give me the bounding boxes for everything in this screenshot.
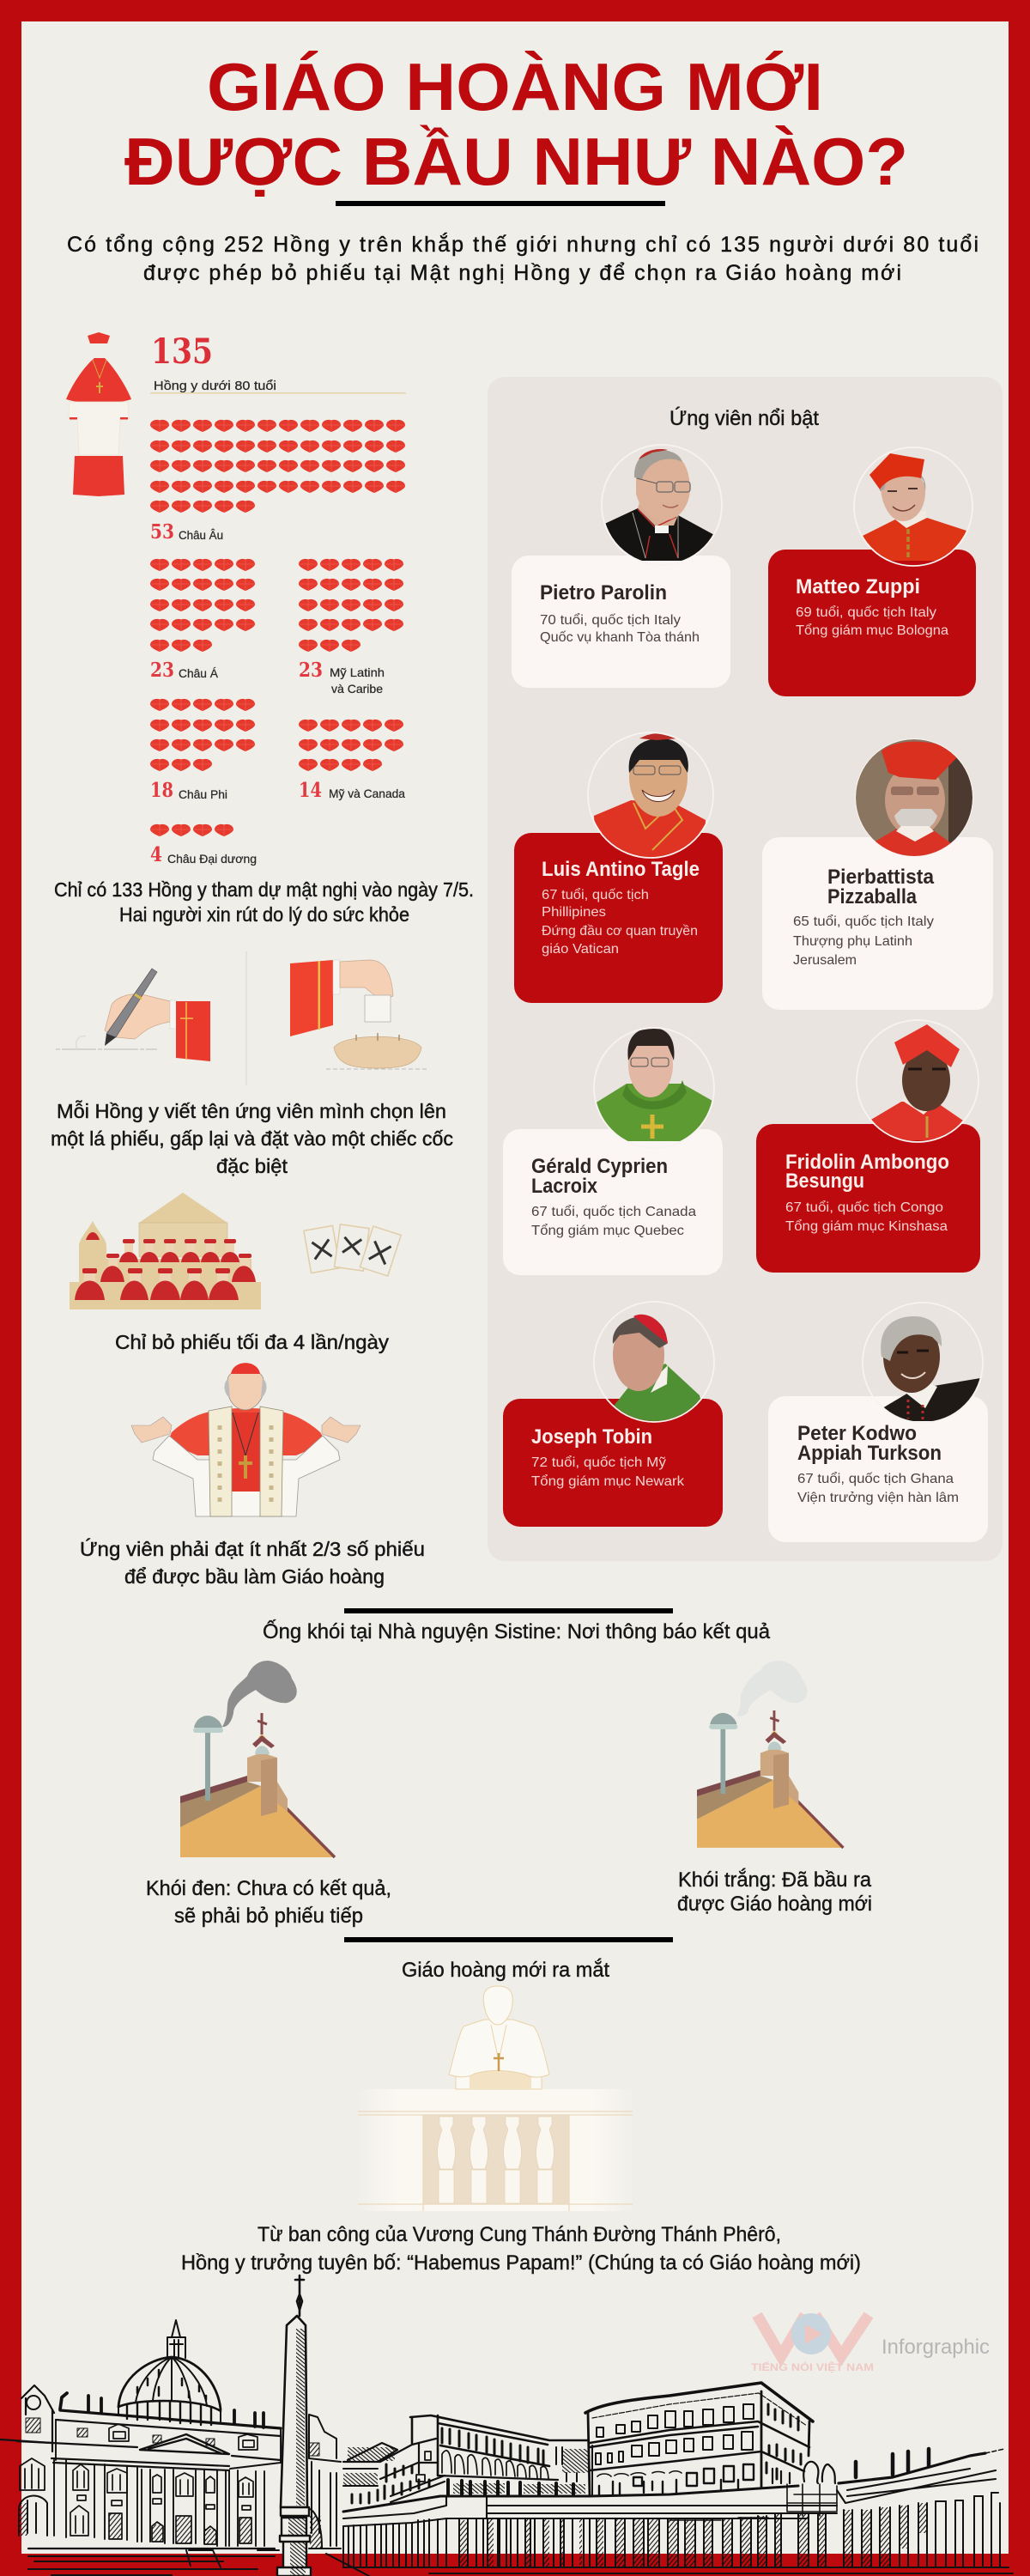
icon grid: Latin America 23: và Caribe (331, 682, 383, 696)
icon: chimney with black smoke (180, 1661, 335, 1857)
logo: VOV (751, 2313, 990, 2373)
ground lines on red band (28, 2550, 1013, 2576)
card: Pietro Parolin: Pietro Parolin (540, 581, 667, 605)
card: Matteo Zuppi: 69 tuổi, quốc tịch Italy (796, 605, 936, 620)
icon: hand dropping ballot in bowl (290, 960, 429, 1069)
palace wing (343, 2415, 592, 2512)
card: Luis Antino Tagle: 67 tuổi, quốc tịch (542, 887, 649, 902)
icon: cardinal blessing (131, 1363, 360, 1516)
card: Pierbattista Pizzaballa: Pierbattista (827, 866, 935, 889)
text: max 4 votes a day: Chỉ bỏ phiếu tối đa 4 lần/ngày (115, 1331, 390, 1353)
icon: cardinal figure (66, 332, 131, 496)
icon grid: Oceania 4: 4 (150, 843, 162, 866)
icon grid: USA and Canada 14: Mỹ và Canada (329, 787, 405, 800)
card: Fridolin Ambongo Besungu: Besungu (785, 1170, 864, 1193)
icon grid: Europe 53: 53 (150, 520, 174, 544)
icon: crossed ballots (304, 1224, 401, 1276)
icon grid: Latin America 23: 23 (299, 659, 323, 682)
card: Joseph Tobin: 72 tuổi, quốc tịch Mỹ (531, 1455, 666, 1470)
icon: balcony (358, 2089, 633, 2211)
card: Joseph Tobin: Tổng giám mục Newark (531, 1473, 685, 1489)
icon grid: Africa 18: Châu Phi (179, 787, 227, 801)
text: white smoke (677, 1868, 872, 1916)
stat: 135 cardinals: 135 (151, 331, 213, 372)
colonnade (343, 2449, 1004, 2567)
obelisk (277, 2275, 311, 2576)
logo: VOV: TIẾNG NÓI VIỆT NAM (751, 2360, 874, 2373)
card: Pierbattista Pizzaballa: Jerusalem (793, 953, 857, 968)
title: ĐƯỢC BẦU NHƯ NÀO? (124, 124, 908, 199)
dome of the basilica (118, 2320, 221, 2425)
card: Pietro Parolin: Quốc vụ khanh Tòa thánh (540, 630, 700, 645)
icon grid: USA and Canada 14: 14 (299, 779, 322, 802)
text: 133 attending: Chỉ có 133 Hồng y tham dự mật nghị vào ngày 7/5. (54, 878, 474, 901)
icon: pope (449, 1986, 549, 2089)
card: Peter Kodwo Appiah Turkson: Viện trưởng viện hàn lâm (797, 1491, 959, 1505)
panel: notable candidates (488, 377, 1003, 1561)
card: Luis Antino Tagle: Đứng đầu cơ quan truyền (542, 924, 698, 939)
card: Peter Kodwo Appiah Turkson: 67 tuổi, quốc tịch Ghana (797, 1471, 954, 1486)
card: Pierbattista Pizzaballa: Pizzaballa (827, 885, 918, 908)
subtitle (67, 232, 978, 285)
card: Peter Kodwo Appiah Turkson (768, 1303, 988, 1542)
card: Pierbattista Pizzaballa: Thượng phụ Latinh (793, 934, 912, 949)
title (124, 49, 908, 199)
card: Matteo Zuppi: Matteo Zuppi (796, 575, 920, 598)
icon grid: Oceania 4 (150, 824, 257, 866)
title: GIÁO HOÀNG MỚI (207, 49, 823, 125)
card: Luis Antino Tagle: Luis Antino Tagle (542, 858, 700, 881)
text: white smoke: Khói trắng: Đã bầu ra (678, 1868, 872, 1892)
text: black smoke: Khói đen: Chưa có kết quả, (146, 1877, 391, 1900)
card: Fridolin Ambongo Besungu: Fridolin Ambongo (785, 1151, 949, 1174)
icon grid: Asia 23 (150, 559, 255, 682)
text: black smoke: sẽ phải bỏ phiếu tiếp (174, 1905, 363, 1928)
card: Fridolin Ambongo Besungu (756, 1020, 980, 1273)
card: Gerald Cyprien Lacroix (503, 1028, 723, 1275)
text: black smoke (146, 1877, 391, 1928)
icon grid: Africa 18 (150, 699, 255, 802)
card: Pietro Parolin (512, 445, 730, 688)
hatched columns (459, 2503, 927, 2567)
card: Gerald Cyprien Lacroix: Gérald Cyprien (531, 1155, 668, 1178)
card: Gerald Cyprien Lacroix: Lacroix (531, 1175, 598, 1198)
heading: new pope appears: Giáo hoàng mới ra mắt (402, 1959, 609, 1982)
card: Pietro Parolin: 70 tuổi, quốc tịch Italy (540, 612, 681, 628)
basilica facade (0, 2385, 341, 2549)
card: Peter Kodwo Appiah Turkson: Peter Kodwo (797, 1422, 917, 1445)
illustration: St Peter's Square sketch (0, 2275, 1013, 2576)
text: ballot writing: Mỗi Hồng y viết tên ứng viên mình chọn lên (57, 1100, 446, 1122)
card: Luis Antino Tagle (514, 732, 723, 1003)
icon grid: Oceania 4: Châu Đại dương (167, 852, 257, 866)
stat: 135 cardinals: Hồng y dưới 80 tuổi (154, 379, 276, 393)
heading: chimney: Ống khói tại Nhà nguyện Sistine: Nơi thông báo kết quả (263, 1619, 771, 1643)
text: ballot writing (51, 1100, 453, 1177)
card: Matteo Zuppi: Tổng giám mục Bologna (796, 623, 948, 638)
card: Gerald Cyprien Lacroix: 67 tuổi, quốc tịch Canada (531, 1204, 696, 1219)
icon: hand writing ballot (56, 969, 210, 1061)
icon: cardinals in Sistine chapel (70, 1193, 261, 1309)
text: 133 attending (54, 878, 474, 926)
card: Matteo Zuppi (768, 447, 976, 696)
text: two thirds: Ứng viên phải đạt ít nhất 2/3 số phiếu (80, 1538, 425, 1560)
text: two thirds (80, 1538, 425, 1588)
text: ballot writing: đặc biệt (216, 1155, 288, 1177)
card: Fridolin Ambongo Besungu: Tổng giám mục Kinshasa (785, 1218, 948, 1234)
card: Joseph Tobin: Joseph Tobin (531, 1425, 652, 1449)
icon grid: Asia 23: Châu Á (179, 666, 219, 680)
text: white smoke: được Giáo hoàng mới (677, 1893, 872, 1916)
card: Peter Kodwo Appiah Turkson: Appiah Turkson (797, 1442, 942, 1465)
card: Fridolin Ambongo Besungu: 67 tuổi, quốc tịch Congo (785, 1200, 943, 1215)
text: habemus papam (181, 2223, 861, 2275)
icon grid: Africa 18: 18 (150, 779, 173, 802)
icon grid: Europe 53: Châu Âu (179, 528, 223, 542)
card: Pierbattista Pizzaballa (762, 738, 993, 1010)
stat: 135 cardinals (150, 331, 406, 393)
icon grid: Latin America 23 (299, 559, 403, 696)
text: ballot writing: một lá phiếu, gấp lại và đặt vào một chiếc cốc (51, 1127, 453, 1150)
card: Gerald Cyprien Lacroix: Tổng giám mục Quebec (531, 1223, 684, 1238)
text: two thirds: để được bầu làm Giáo hoàng (124, 1565, 385, 1588)
icon grid: Latin America 23: Mỹ Latinh (330, 665, 385, 679)
card: Joseph Tobin (503, 1302, 723, 1527)
card: Luis Antino Tagle: Phillipines (542, 905, 606, 920)
panel heading: Ứng viên nổi bật (670, 407, 819, 430)
icon grid: Europe 53 (150, 420, 405, 544)
logo: VOV: Inforgraphic (882, 2336, 990, 2359)
text: habemus papam: Từ ban công của Vương Cung Thánh Đường Thánh Phêrô, (258, 2223, 781, 2246)
subtitle: được phép bỏ phiếu tại Mật nghị Hồng y để chọn ra Giáo hoàng mới (143, 261, 901, 285)
icon: chimney with white smoke (697, 1661, 843, 1848)
Apostolic Palace (585, 2383, 835, 2496)
icon grid: Asia 23: 23 (150, 659, 174, 682)
text: habemus papam: Hồng y trưởng tuyên bố: “Habemus Papam!” (Chúng ta có Giáo hoàng mới) (181, 2251, 861, 2275)
card: Pierbattista Pizzaballa: 65 tuổi, quốc tịch Italy (793, 914, 934, 929)
card: Luis Antino Tagle: giáo Vatican (542, 942, 619, 957)
text: 133 attending: Hai người xin rút do lý do sức khỏe (119, 903, 409, 926)
icon grid: USA and Canada 14 (299, 720, 405, 802)
subtitle: Có tổng cộng 252 Hồng y trên khắp thế giới nhưng chỉ có 135 người dưới 80 tuổi (67, 232, 978, 257)
